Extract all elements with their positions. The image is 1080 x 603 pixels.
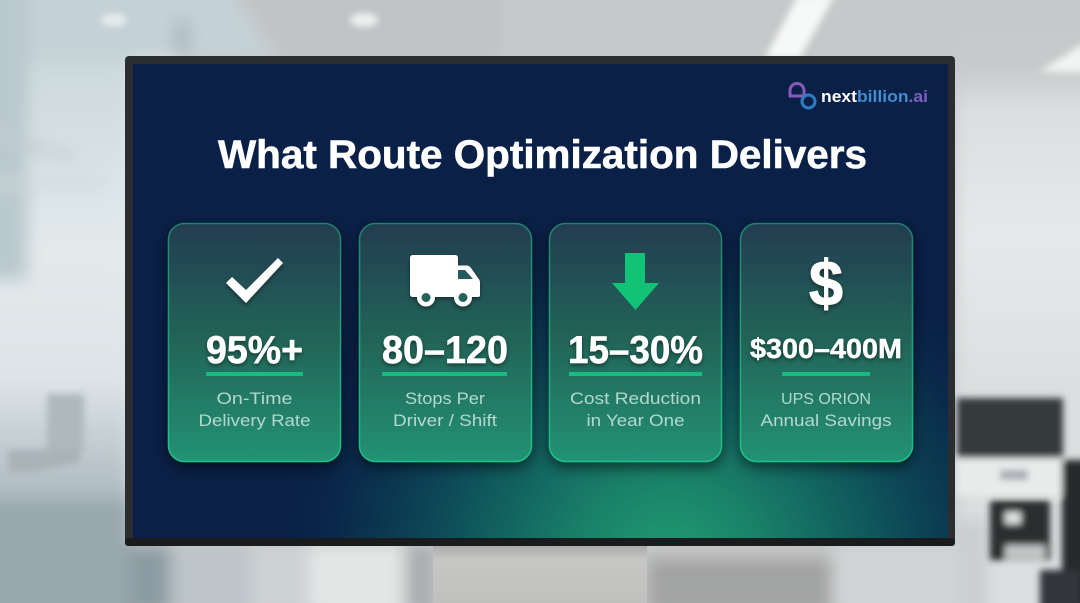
label (760, 391, 892, 430)
underline (569, 372, 702, 376)
card: UPS ORION savings (740, 224, 912, 462)
logo wordmark: nextbillion.ai (821, 88, 928, 106)
stat: 95%+: 95%+ (206, 329, 303, 372)
stat: 80-120: 80–120 (382, 329, 508, 372)
label (393, 389, 497, 430)
label: UPS ORION (781, 391, 871, 408)
label: in Year One (586, 411, 684, 430)
monitor stand (433, 545, 647, 603)
underline (382, 372, 507, 376)
card: stops per driver (360, 224, 532, 462)
ceiling lights (101, 14, 127, 26)
screen background (133, 64, 948, 538)
stat: 15-30%: 15–30% (568, 329, 703, 372)
label: On-Time (216, 389, 292, 408)
logo: nextbillion.ai (790, 84, 928, 108)
label: Driver / Shift (393, 411, 497, 430)
title: What Route Optimization Delivers (218, 133, 867, 177)
label: Delivery Rate (198, 411, 310, 430)
monitor (125, 56, 955, 546)
underline (782, 372, 870, 376)
label: Cost Reduction (570, 389, 701, 408)
monitor bezel (125, 56, 955, 546)
icon: dollar sign: $ (809, 247, 843, 319)
icon: logo loops (790, 84, 815, 108)
blurred chair (47, 394, 84, 452)
card: cost reduction (550, 224, 722, 462)
label: Stops Per (405, 389, 485, 408)
icon: down arrow (612, 253, 659, 310)
stat: $300-400M: $300–400M (750, 333, 902, 364)
underline (206, 372, 303, 376)
blurred desk and monitor (957, 398, 1063, 458)
icon: truck (410, 255, 480, 306)
label (570, 389, 701, 430)
label (198, 389, 310, 430)
label: Annual Savings (760, 411, 892, 430)
card: on-time delivery (168, 224, 340, 462)
icon: check mark (226, 258, 283, 303)
